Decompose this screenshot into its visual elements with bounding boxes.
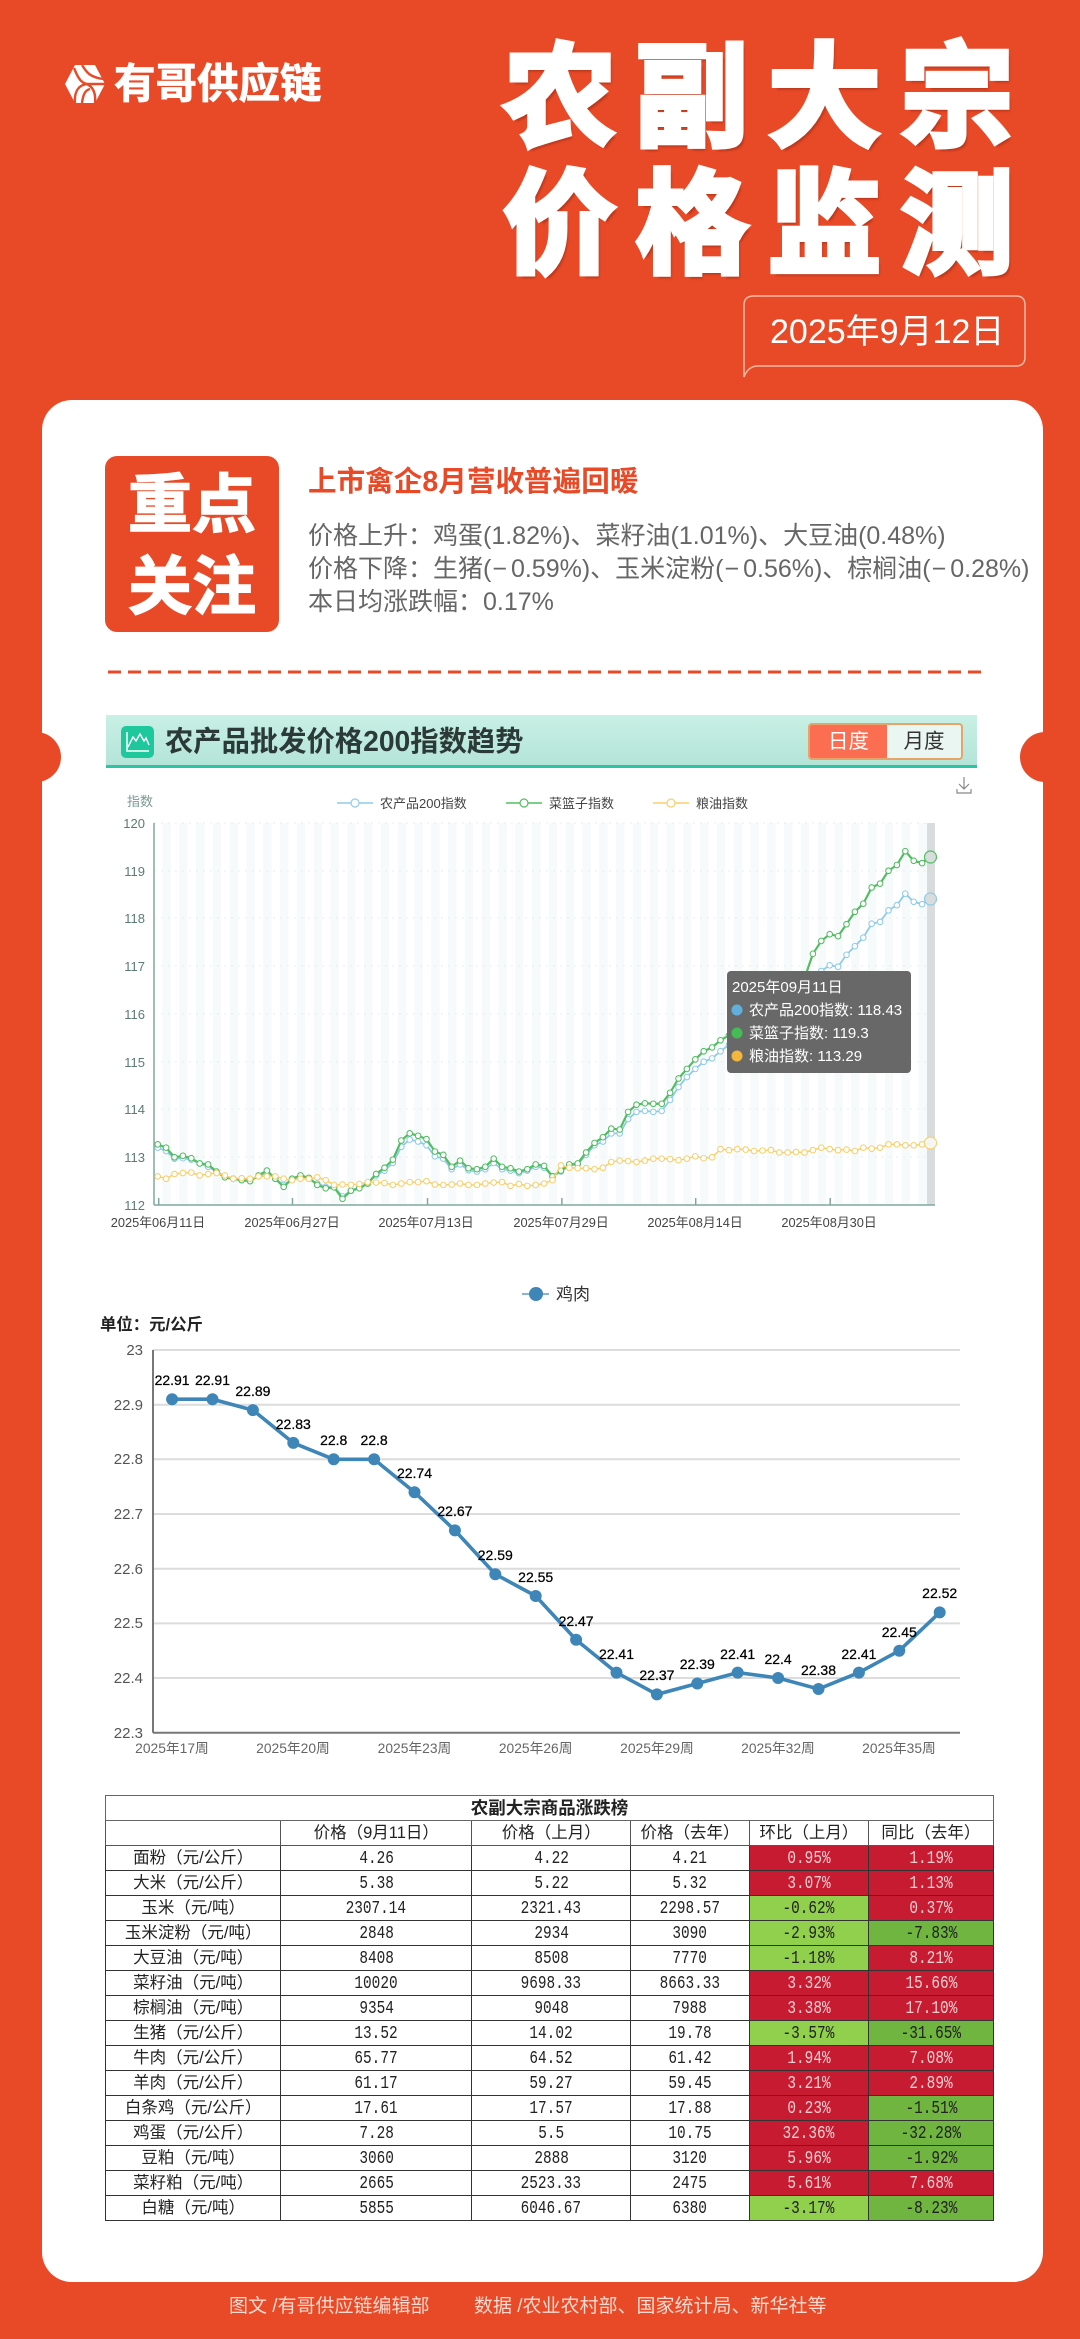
data labels: 22.55 xyxy=(518,1569,553,1585)
table: commodity price changes: 17.57 xyxy=(530,2098,573,2118)
table: commodity price changes: 菜籽粕（元/吨） xyxy=(133,2174,253,2192)
table: commodity price changes: 农副大宗商品涨跌榜 xyxy=(471,1798,628,1818)
x axis labels: 2025年35周 xyxy=(862,1741,936,1756)
x axis labels: 2025年06月11日 xyxy=(111,1215,205,1230)
left notch xyxy=(11,732,61,782)
table: commodity price changes: 7.68% xyxy=(909,2174,953,2194)
x axis labels: 2025年17周 xyxy=(135,1741,209,1756)
table: commodity price changes: 2307.14 xyxy=(346,1898,407,1918)
table: commodity price changes: 2298.57 xyxy=(660,1898,720,1918)
y axis labels: 116 xyxy=(124,1007,145,1022)
y axis labels: 22.3 xyxy=(114,1725,143,1742)
legend: 鸡肉 xyxy=(556,1285,590,1304)
table: commodity price changes: 64.52 xyxy=(530,2048,573,2068)
table: commodity price changes: 17.88 xyxy=(668,2098,712,2118)
right notch xyxy=(1020,732,1070,782)
price summary text: 本日均涨跌幅：0.17% xyxy=(308,588,554,616)
x axis labels: 2025年23周 xyxy=(378,1741,451,1756)
series: blue index xyxy=(158,894,930,1196)
unit label: 单位：元/公斤 xyxy=(100,1315,203,1334)
price summary text xyxy=(308,522,1029,616)
table: commodity price changes: 白糖（元/吨） xyxy=(141,2199,245,2217)
series: yellow index xyxy=(158,1143,930,1186)
table: commodity price changes: 65.77 xyxy=(355,2048,398,2068)
y axis labels: 22.7 xyxy=(114,1506,143,1523)
data labels: 22.89 xyxy=(235,1383,271,1399)
data labels: 22.37 xyxy=(639,1667,675,1683)
y axis labels: 113 xyxy=(124,1150,145,1165)
title xyxy=(500,35,1033,288)
date badge: 2025年9月12日 xyxy=(770,313,1004,351)
table: commodity price changes: -1.92% xyxy=(905,2148,957,2168)
table: commodity price changes: 2665 xyxy=(359,2174,394,2194)
data labels: 22.83 xyxy=(276,1416,311,1432)
table: commodity price changes: 4.22 xyxy=(534,1848,568,1868)
table: commodity price changes: -32.28% xyxy=(901,2124,961,2144)
y axis labels: 22.4 xyxy=(114,1670,143,1687)
table: commodity price changes: 9354 xyxy=(359,1998,394,2018)
table: commodity price changes: 59.45 xyxy=(668,2074,712,2094)
end markers xyxy=(924,851,936,1149)
icon: download xyxy=(956,777,972,794)
table: commodity price changes: 1.13% xyxy=(909,1874,953,1894)
x axis labels: 2025年06月27日 xyxy=(244,1215,340,1230)
data labels: 22.45 xyxy=(882,1624,917,1640)
table: commodity price changes: 0.95% xyxy=(787,1848,830,1868)
table: commodity price changes: 4.26 xyxy=(359,1848,394,1868)
data labels: 22.4 xyxy=(764,1651,792,1667)
legend: 农产品200指数 xyxy=(380,796,467,811)
brand name: 有哥供应链 xyxy=(114,60,322,107)
table: commodity price changes: 价格（上月） xyxy=(502,1824,601,1842)
table: commodity price changes: 32.36% xyxy=(783,2124,835,2144)
table: commodity price changes: -3.17% xyxy=(783,2198,835,2218)
data labels: 22.41 xyxy=(720,1646,755,1662)
y axis labels xyxy=(114,1342,143,1742)
plot background stripes xyxy=(154,823,935,1205)
table: commodity price changes: 生猪（元/公斤） xyxy=(133,2024,253,2042)
y axis labels: 117 xyxy=(124,959,145,974)
toggle: day / month: 日度 xyxy=(828,730,869,753)
table: commodity price changes: 玉米淀粉（元/吨） xyxy=(125,1924,261,1942)
table: commodity price changes: 棕榈油（元/吨） xyxy=(133,1999,253,2017)
table: commodity price changes: 0.37% xyxy=(909,1898,953,1918)
footer credit: text: 图文 /有哥供应链编辑部 xyxy=(229,2296,430,2317)
table: commodity price changes: 10.75 xyxy=(668,2124,712,2144)
data labels: 22.91 xyxy=(195,1372,230,1388)
table: commodity price changes: 8663.33 xyxy=(660,1974,720,1994)
y axis labels: 23 xyxy=(126,1342,143,1359)
table: commodity price changes: 8508 xyxy=(534,1948,568,1968)
data labels: 22.8 xyxy=(320,1432,348,1448)
x axis labels: 2025年08月14日 xyxy=(647,1215,743,1230)
y axis labels xyxy=(123,816,145,1213)
y axis labels: 22.8 xyxy=(114,1451,143,1468)
table: commodity price changes: 61.42 xyxy=(668,2048,712,2068)
table: commodity price changes: 5.96% xyxy=(787,2148,830,2168)
table: commodity price changes: 3.38% xyxy=(787,1998,830,2018)
legend: 菜篮子指数 xyxy=(549,796,614,811)
table: commodity price changes: 15.66% xyxy=(905,1974,957,1994)
table: commodity price changes: 7770 xyxy=(673,1948,707,1968)
x axis labels: 2025年07月29日 xyxy=(513,1215,609,1230)
price line xyxy=(172,1399,940,1694)
panel: white card xyxy=(42,400,1043,2282)
y axis labels: 120 xyxy=(123,816,145,831)
table: commodity price changes: 大豆油（元/吨） xyxy=(133,1949,253,1967)
table: commodity price changes: 61.17 xyxy=(355,2074,398,2094)
headline: 上市禽企8月营收普遍回暖 xyxy=(308,466,638,498)
y axis labels: 22.6 xyxy=(114,1561,143,1578)
index chart header bar xyxy=(106,715,977,768)
tooltip xyxy=(727,971,911,1073)
x axis labels: 2025年29周 xyxy=(620,1741,694,1756)
table: commodity price changes: 2.89% xyxy=(909,2074,953,2094)
data labels: 22.8 xyxy=(360,1432,388,1448)
y axis labels: 22.9 xyxy=(114,1397,143,1414)
date badge xyxy=(743,295,1026,378)
table: commodity price changes: 3090 xyxy=(673,1924,707,1944)
key focus badge: 重点 xyxy=(128,469,256,541)
table: commodity price changes: -1.18% xyxy=(783,1948,835,1968)
table: commodity price changes: 19.78 xyxy=(668,2024,712,2044)
table: commodity price changes: 9048 xyxy=(534,1998,568,2018)
series: green index xyxy=(158,851,930,1199)
table: commodity price changes: 14.02 xyxy=(530,2024,573,2044)
table: commodity price changes: 豆粕（元/吨） xyxy=(141,2149,245,2167)
tooltip: 农产品200指数: 118.43 xyxy=(749,1002,902,1019)
footer credit: data: 数据 /农业农村部、国家统计局、新华社等 xyxy=(474,2296,827,2317)
data lines xyxy=(158,851,930,1199)
gridlines xyxy=(153,1350,960,1678)
tooltip: 2025年09月11日 xyxy=(732,979,843,996)
table: commodity price changes: 5855 xyxy=(359,2198,394,2218)
table: commodity price changes: 5.32 xyxy=(673,1874,707,1894)
table: commodity price changes: 10020 xyxy=(355,1974,398,1994)
logo xyxy=(65,60,322,107)
data labels xyxy=(155,1372,957,1683)
y axis labels: 115 xyxy=(124,1055,145,1070)
data labels: 22.39 xyxy=(680,1656,715,1672)
table: commodity price changes: 鸡蛋（元/公斤） xyxy=(133,2124,253,2142)
table: commodity price changes: 3120 xyxy=(673,2148,707,2168)
table: commodity price changes: 6046.67 xyxy=(521,2198,581,2218)
table: commodity price changes: 17.61 xyxy=(355,2098,398,2118)
x axis labels xyxy=(111,1215,877,1230)
table: commodity price changes: -31.65% xyxy=(901,2024,961,2044)
table: commodity price changes: 7.28 xyxy=(359,2124,394,2144)
icon: chart xyxy=(121,726,154,758)
table: commodity price changes: 3.07% xyxy=(787,1874,830,1894)
tooltip: 菜篮子指数: 119.3 xyxy=(749,1024,869,1042)
table: commodity price changes: 价格（9月11日） xyxy=(314,1824,439,1842)
table: commodity price changes: 4.21 xyxy=(673,1848,707,1868)
x axis labels: 2025年07月13日 xyxy=(378,1215,474,1230)
table: commodity price changes: 2848 xyxy=(359,1924,394,1944)
data labels: 22.59 xyxy=(478,1547,513,1563)
table: commodity price changes: 大米（元/公斤） xyxy=(133,1874,253,1892)
table: commodity price changes xyxy=(105,1795,994,2221)
table: commodity price changes: 6380 xyxy=(673,2198,707,2218)
legend xyxy=(522,1285,590,1304)
table: commodity price changes: 面粉（元/公斤） xyxy=(133,1849,253,1867)
x axis labels: 2025年08月30日 xyxy=(781,1215,877,1230)
data labels: 22.47 xyxy=(559,1613,594,1629)
table: commodity price changes: 2321.43 xyxy=(521,1898,581,1918)
table: commodity price changes: 3.21% xyxy=(787,2074,830,2094)
tooltip: 粮油指数: 113.29 xyxy=(749,1048,862,1065)
table: commodity price changes: 0.23% xyxy=(787,2098,830,2118)
title: 价格监测 xyxy=(503,162,1033,288)
table: commodity price changes: -2.93% xyxy=(783,1924,835,1944)
y axis labels: 112 xyxy=(124,1198,145,1213)
price summary text: 价格下降：生猪(−0.59%)、玉米淀粉(−0.56%)、棕榈油(−0.28%) xyxy=(308,555,1029,583)
table: commodity price changes: 13.52 xyxy=(355,2024,398,2044)
table: commodity price changes: -0.62% xyxy=(783,1898,835,1918)
table: commodity price changes: 玉米（元/吨） xyxy=(141,1899,245,1917)
x axis labels: 2025年20周 xyxy=(256,1741,330,1756)
data points xyxy=(166,1393,946,1700)
table: commodity price changes: 5.22 xyxy=(534,1874,568,1894)
data labels: 22.91 xyxy=(155,1372,190,1388)
table: commodity price changes: 价格（去年） xyxy=(640,1824,739,1842)
key focus badge: 关注 xyxy=(128,551,256,623)
table: commodity price changes: 8408 xyxy=(359,1948,394,1968)
data labels: 22.52 xyxy=(922,1585,957,1601)
chart: agricultural price 200 index xyxy=(111,794,938,1230)
table: commodity price changes: 7.08% xyxy=(909,2048,953,2068)
table: commodity price changes: 羊肉（元/公斤） xyxy=(133,2074,253,2092)
table: commodity price changes: -7.83% xyxy=(905,1924,957,1944)
toggle: day / month: 月度 xyxy=(904,730,944,753)
table: commodity price changes: 2523.33 xyxy=(521,2174,581,2194)
table: commodity price changes: 5.5 xyxy=(538,2124,564,2144)
table: commodity price changes: 5.38 xyxy=(359,1874,394,1894)
legend: 粮油指数 xyxy=(696,796,748,811)
icon: hexagon logo mark xyxy=(65,65,104,103)
table: commodity price changes: 环比（上月） xyxy=(759,1824,858,1842)
x axis labels: 2025年32周 xyxy=(741,1741,815,1756)
table: commodity price changes: 1.94% xyxy=(787,2048,830,2068)
y axis unit: 指数 xyxy=(127,794,153,809)
price summary text: 价格上升：鸡蛋(1.82%)、菜籽油(1.01%)、大豆油(0.48%) xyxy=(308,522,946,550)
table: commodity price changes: 59.27 xyxy=(530,2074,573,2094)
axes xyxy=(154,823,935,1205)
table: commodity price changes: 2934 xyxy=(534,1924,568,1944)
table: commodity price changes: 5.61% xyxy=(787,2174,830,2194)
chart section title: 农产品批发价格200指数趋势 xyxy=(165,725,523,757)
table: commodity price changes: 牛肉（元/公斤） xyxy=(133,2049,253,2067)
y axis labels: 114 xyxy=(124,1102,145,1117)
table: commodity price changes: 菜籽油（元/吨） xyxy=(133,1974,253,1992)
table: commodity price changes: -1.51% xyxy=(905,2098,957,2118)
table: commodity price changes: 17.10% xyxy=(905,1998,957,2018)
data labels: 22.67 xyxy=(437,1503,473,1519)
table: commodity price changes: 7988 xyxy=(673,1998,707,2018)
x axis labels: 2025年26周 xyxy=(499,1741,573,1756)
data labels: 22.74 xyxy=(397,1465,432,1481)
toggle: day / month xyxy=(808,723,963,760)
table: commodity price changes: 2475 xyxy=(673,2174,707,2194)
chart: chicken price xyxy=(100,1285,960,1756)
data labels: 22.38 xyxy=(801,1662,836,1678)
table: commodity price changes: 2888 xyxy=(534,2148,568,2168)
data labels: 22.41 xyxy=(841,1646,877,1662)
table: commodity price changes: 白条鸡（元/公斤） xyxy=(125,2099,261,2117)
data labels: 22.41 xyxy=(599,1646,634,1662)
table: commodity price changes: 1.19% xyxy=(909,1848,953,1868)
axes xyxy=(153,1350,960,1733)
legend xyxy=(337,796,748,811)
table: commodity price changes: -8.23% xyxy=(905,2198,957,2218)
y axis labels: 119 xyxy=(124,864,145,879)
key focus badge xyxy=(105,456,279,632)
table: commodity price changes: 9698.33 xyxy=(521,1974,581,1994)
y axis labels: 22.5 xyxy=(114,1615,143,1632)
x axis labels xyxy=(135,1741,936,1756)
table: commodity price changes: 3060 xyxy=(359,2148,394,2168)
table: commodity price changes: 同比（去年） xyxy=(881,1824,980,1842)
title: 农副大宗 xyxy=(503,35,1033,161)
y axis labels: 118 xyxy=(124,911,145,926)
table: commodity price changes: -3.57% xyxy=(783,2024,835,2044)
table: commodity price changes: 3.32% xyxy=(787,1974,830,1994)
table: commodity price changes: 8.21% xyxy=(909,1948,953,1968)
